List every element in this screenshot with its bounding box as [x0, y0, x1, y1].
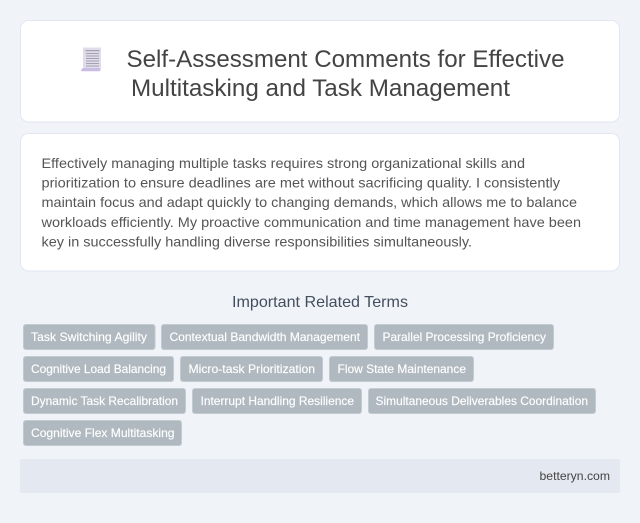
tag — [368, 388, 596, 414]
tag: Parallel Processing Proficiency — [382, 330, 546, 344]
tag list — [24, 324, 596, 446]
footer source: betteryn.com — [540, 469, 610, 483]
tag: Simultaneous Deliverables Coordination — [376, 394, 588, 408]
tag — [180, 356, 322, 382]
tag — [24, 356, 174, 382]
tag: Interrupt Handling Resilience — [200, 394, 354, 408]
title — [126, 46, 564, 102]
paragraph: workloads efficiently. My proactive communication and time management have been — [40, 214, 581, 230]
tag: Contextual Bandwidth Management — [170, 330, 361, 344]
title: Self-Assessment Comments for Effective — [126, 46, 564, 73]
tag: Micro-task Prioritization — [188, 362, 315, 376]
paragraph: Effectively managing multiple tasks requires strong organizational skills and — [42, 155, 525, 171]
paragraph: prioritization to ensure deadlines are met without sacrificing quality. I consistently — [42, 175, 560, 191]
tag: Cognitive Load Balancing — [31, 362, 166, 376]
tag — [24, 388, 186, 414]
heading: important related terms: Important Related Terms — [232, 294, 408, 311]
tag — [24, 420, 182, 446]
paragraph — [40, 155, 581, 249]
tag — [24, 324, 155, 350]
icon: document scroll — [81, 48, 101, 71]
panel: header — [20, 20, 620, 122]
tag — [374, 324, 554, 350]
tag: Dynamic Task Recalibration — [31, 394, 178, 408]
title: Multitasking and Task Management — [131, 75, 510, 102]
tag: Flow State Maintenance — [338, 362, 466, 376]
tag: Cognitive Flex Multitasking — [31, 426, 174, 440]
tag — [162, 324, 368, 350]
paragraph: key in successfully handling diverse responsibilities simultaneously. — [42, 233, 472, 249]
tag — [330, 356, 474, 382]
tag: Task Switching Agility — [31, 330, 147, 344]
footer — [20, 459, 620, 493]
paragraph: maintain focus and adapt quickly to changing demands, which allows me to balance — [42, 194, 577, 210]
tag — [192, 388, 362, 414]
panel: summary text — [20, 134, 620, 271]
